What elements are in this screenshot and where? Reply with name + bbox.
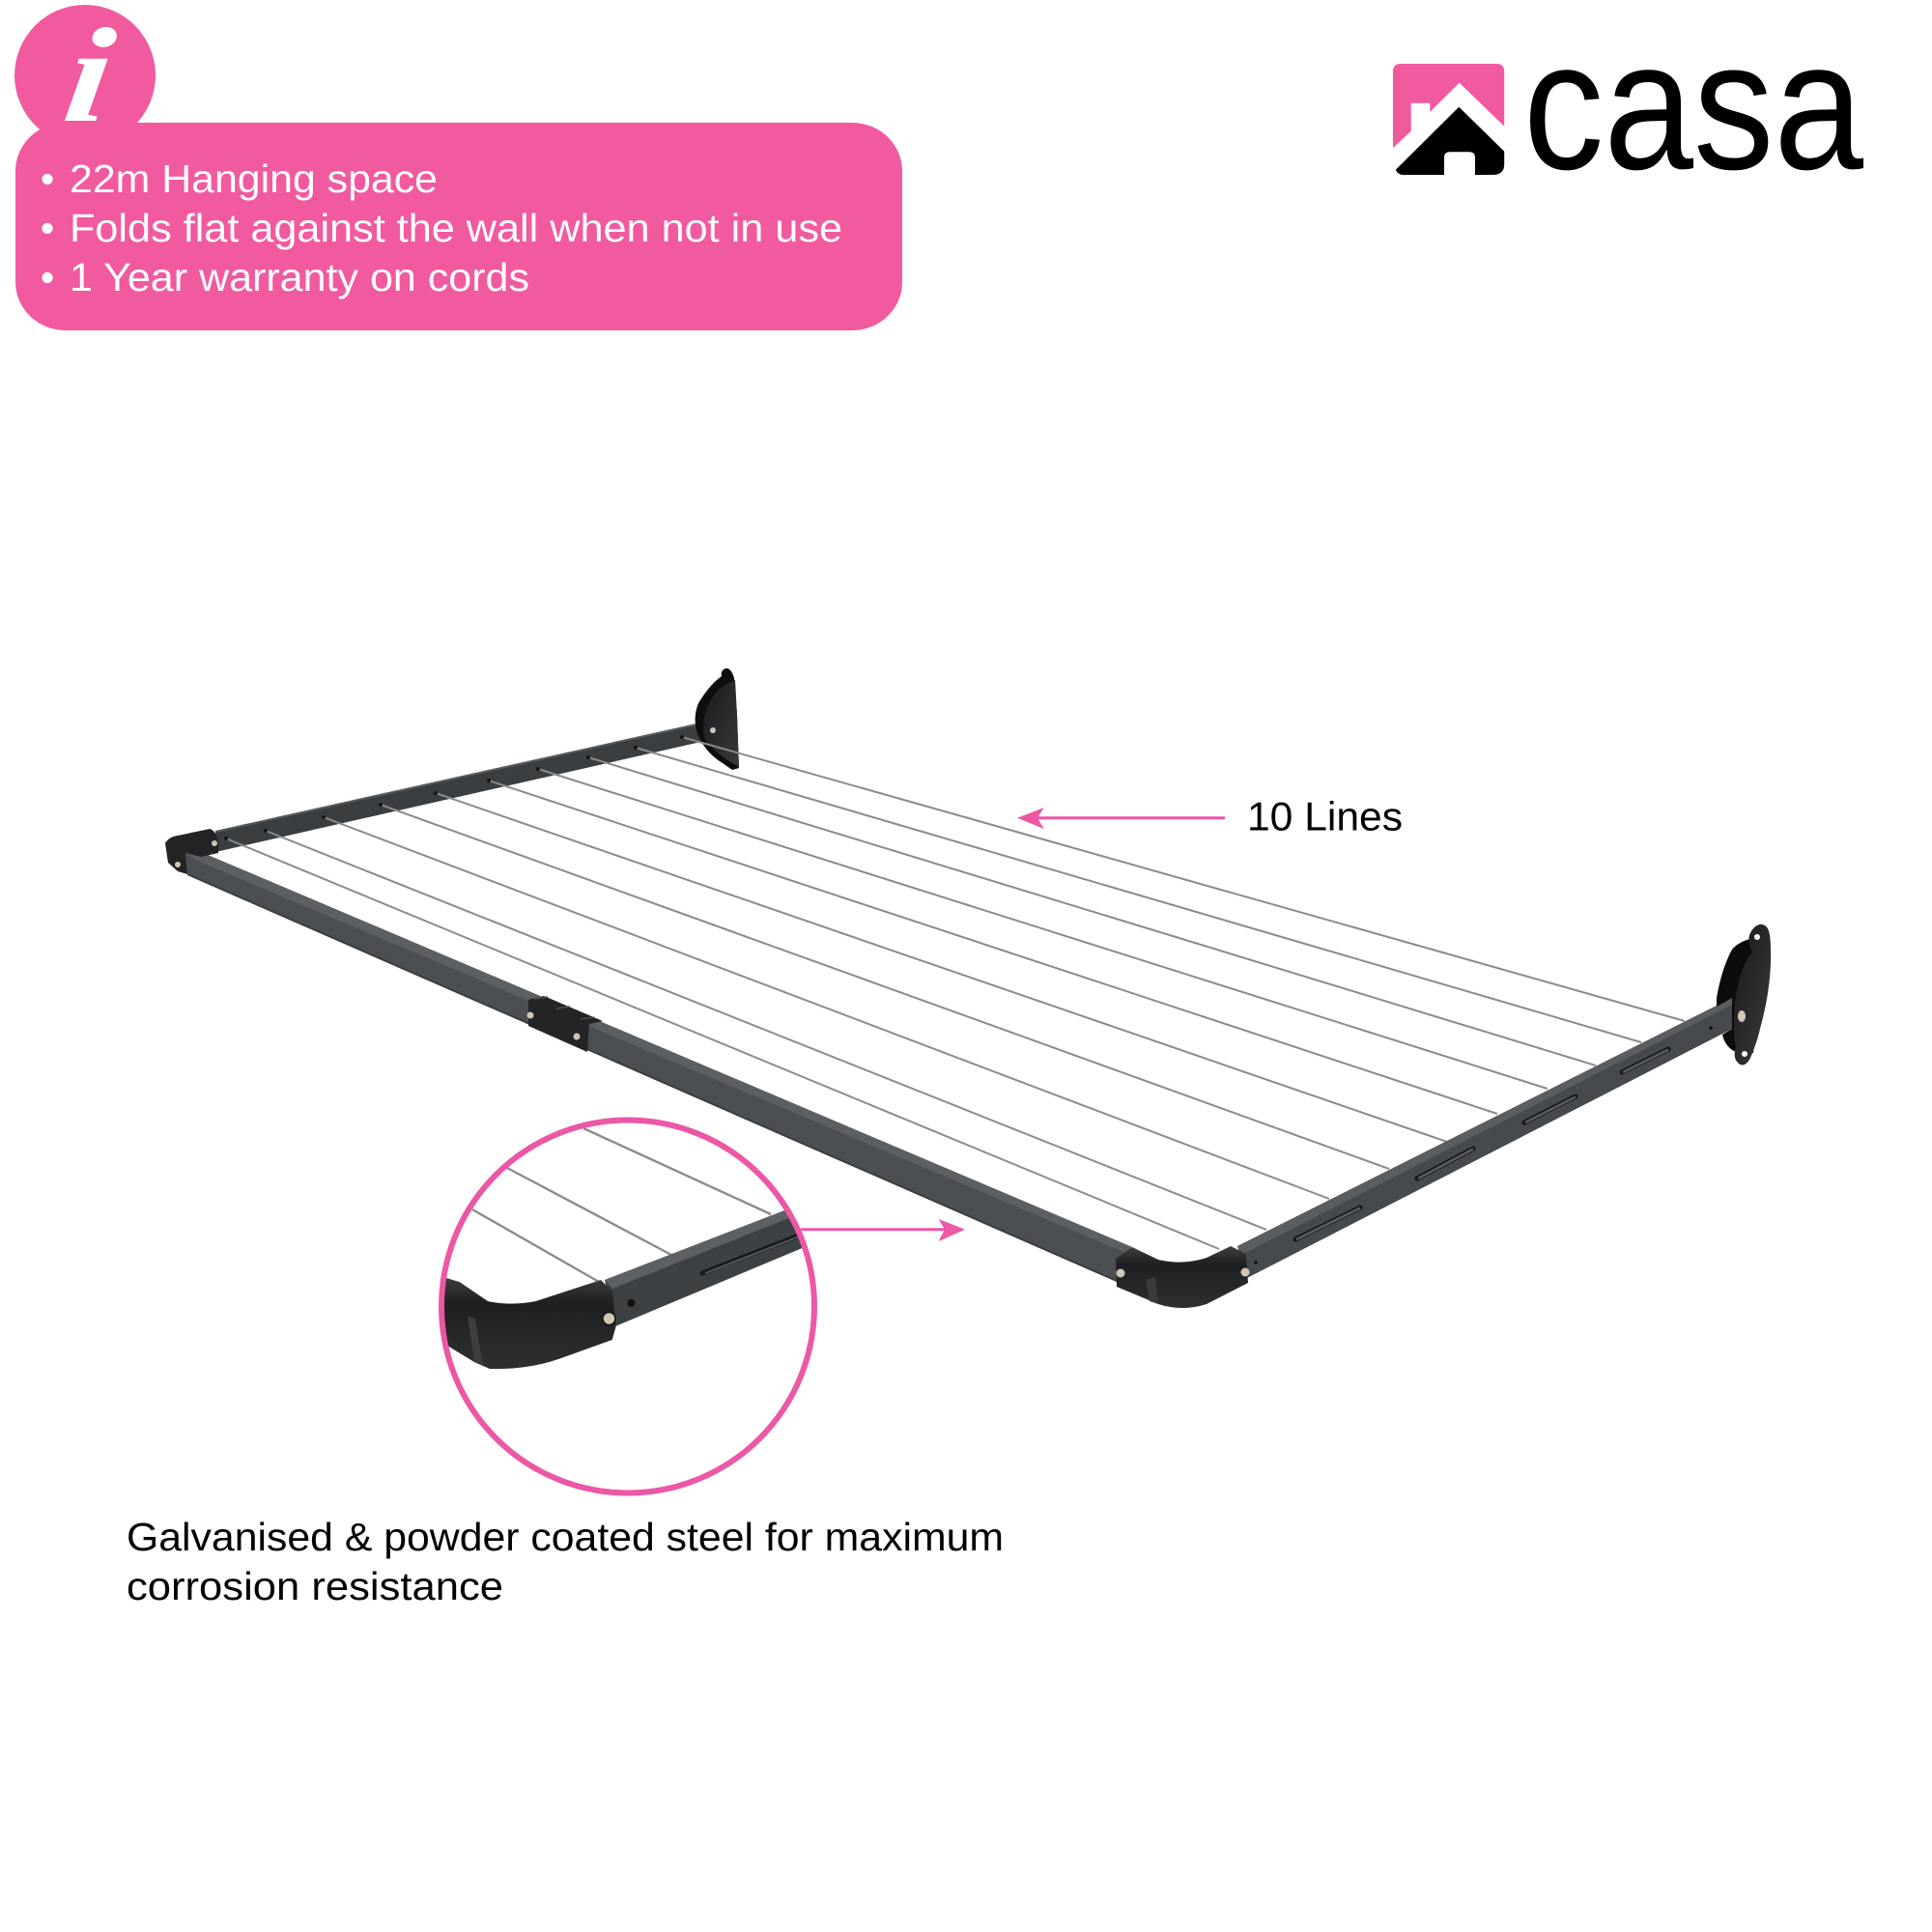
arrow: to lines [1017,808,1225,829]
bullet list: Folds flat against the wall when not in use [70,206,842,250]
mounting holes [1754,934,1760,940]
caption: steel coating: corrosion resistance [127,1564,503,1608]
inset slot [702,1233,807,1273]
inset crease [468,1316,483,1366]
bracket bolt [710,727,716,733]
arrow: detail to frame [801,1219,965,1241]
info circle badge [14,5,156,146]
bullet list: • [41,206,54,250]
cord holes in back bar [224,735,684,840]
wordmark: casa [1523,4,1863,209]
hanging slots [1295,1049,1668,1239]
ten cord lines [226,737,1685,1249]
info panel [14,1,902,330]
bullet list: • [41,255,54,299]
icon: italic i: i [56,1,123,151]
icon: black house [1396,107,1504,175]
bracket bolt [1738,1010,1746,1022]
inset bolt [603,1312,615,1325]
right bar [1237,998,1732,1278]
front bar [185,853,1132,1282]
back bar [215,722,705,852]
bullet list: 22m Hanging space [70,156,438,201]
icon: pink square with roof [1393,64,1504,148]
far corner cap [165,829,218,874]
caption: steel coating: Galvanised & powder coated steel for maximum [127,1515,1004,1559]
bullet list [41,156,842,299]
magnified detail circle [435,1119,815,1493]
near corner cap [1116,1246,1258,1308]
folding hinge [527,996,603,1052]
bullet list: • [41,156,54,201]
pink rounded panel [15,123,902,330]
right wall bracket [1709,924,1771,1065]
label: 10 lines: 10 Lines [1247,793,1403,838]
left wall bracket [696,668,739,770]
inset hole [627,1299,635,1307]
casa logo [1393,4,1863,209]
product: folding clothesline rack [165,668,1771,1308]
caption: steel coating [127,1515,1004,1608]
pink ring [441,1121,814,1493]
bullet list: 1 Year warranty on cords [70,255,529,299]
inset corner cap [435,1275,616,1369]
inset cords [472,1128,771,1282]
inset content [444,1128,802,1370]
inset bar [605,1208,811,1326]
